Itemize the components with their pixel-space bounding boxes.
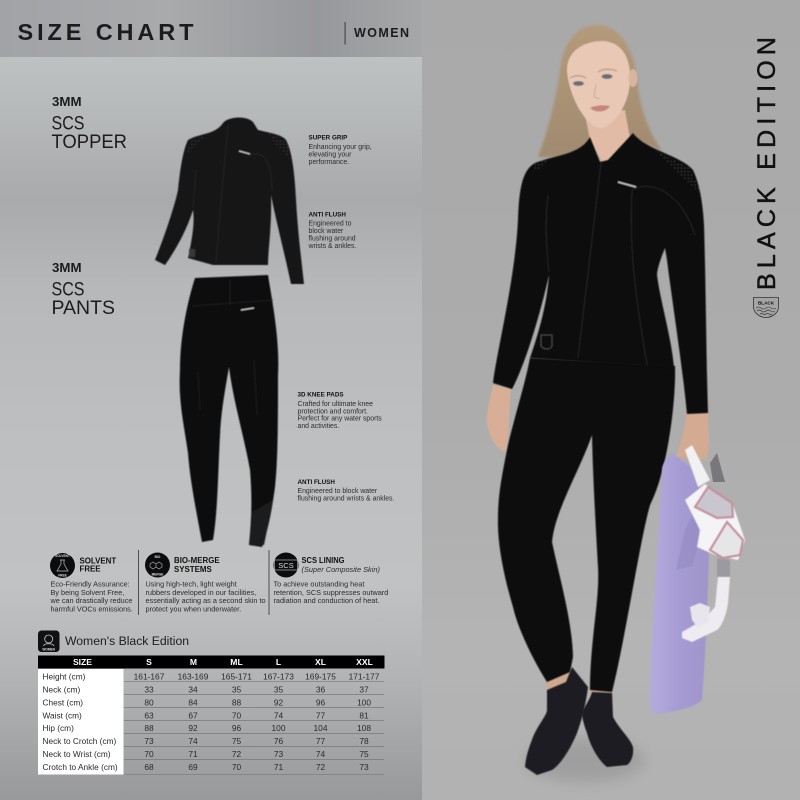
table values: 74 — [188, 736, 198, 746]
table values: 68 — [144, 762, 154, 772]
size table — [38, 656, 384, 774]
table heading — [38, 630, 189, 652]
table heading: Women's Black Edition — [65, 634, 189, 648]
model hair — [538, 25, 663, 158]
callout: super grip: Enhancing your grip, — [308, 144, 372, 151]
subtitle: women: WOMEN — [354, 26, 409, 40]
table header row: L — [276, 657, 281, 667]
icon: solvent free badge — [50, 553, 75, 578]
table values: 88 — [144, 723, 154, 733]
icon: black shield logo: BLACK — [758, 300, 775, 306]
row labels column: Neck to Crotch (cm) — [42, 736, 116, 746]
table values: 73 — [144, 736, 154, 746]
table values: 161-167 — [134, 672, 165, 682]
feature: bio-merge systems — [145, 552, 266, 614]
heading: SCS Topper: TOPPER — [52, 131, 127, 153]
table values: 100 — [272, 723, 286, 733]
callout: anti flush topper: Engineered to — [308, 220, 352, 228]
feature: bio-merge systems: Using high-tech, light weight — [146, 580, 237, 588]
table values: 104 — [314, 723, 328, 733]
icon: bio-merge badge: MERGE — [152, 572, 163, 576]
row labels column: Waist (cm) — [42, 710, 82, 720]
table values: 92 — [188, 723, 198, 733]
table values: 167-173 — [263, 672, 294, 682]
table values: 78 — [359, 736, 369, 746]
table values: 77 — [316, 710, 325, 720]
table values: 169-175 — [305, 672, 336, 682]
model left shoe — [525, 667, 588, 775]
floor shadow — [525, 738, 645, 782]
callout: 3D knee pads: 3D KNEE PADS — [298, 392, 344, 398]
feature: solvent free: Eco-Friendly Assurance: — [50, 580, 130, 588]
table values: 96 — [316, 697, 325, 707]
model photo — [487, 25, 745, 775]
callout: anti flush pants: Engineered to block water — [298, 488, 378, 495]
table values: 70 — [232, 710, 241, 720]
callout: anti flush topper — [308, 212, 356, 250]
callout: super grip: SUPER GRIP — [308, 134, 347, 142]
icon: solvent free badge: FREE — [58, 574, 67, 578]
feature: bio-merge systems: protect you when underwater. — [146, 604, 241, 614]
table values: 37 — [359, 684, 369, 694]
row labels column — [38, 669, 124, 774]
table values: 33 — [144, 684, 154, 694]
model snorkel top — [710, 453, 725, 482]
row labels column: Crotch to Ankle (cm) — [42, 762, 118, 772]
feature: SCS lining: To achieve outstanding heat — [274, 580, 364, 588]
heading: SCS Pants — [52, 260, 115, 319]
heading: SCS Pants: SCS — [52, 278, 84, 300]
callout: anti flush pants: flushing around wrists & ankles. — [298, 496, 394, 502]
feature: SCS lining: (Super Composite Skin) — [302, 565, 380, 574]
feature: SCS lining: retention, SCS suppresses outward — [274, 588, 388, 597]
callout: anti flush pants — [298, 479, 394, 502]
heading: SCS Topper: SCS — [52, 112, 84, 134]
model jacket — [493, 133, 708, 414]
table values: 84 — [188, 697, 198, 707]
table values: 34 — [188, 684, 198, 694]
row labels column: Hip (cm) — [42, 723, 74, 733]
icon: black shield logo — [754, 298, 778, 318]
table values: 163-169 — [178, 672, 209, 682]
callout: super grip: performance. — [308, 159, 349, 166]
table header row — [38, 656, 384, 668]
model snorkel — [682, 558, 730, 642]
table values: 71 — [274, 762, 283, 772]
title: SIZE CHART — [18, 19, 194, 45]
feature: SCS lining — [274, 552, 388, 605]
table header row: XXL — [356, 657, 373, 667]
callout: 3D knee pads: protection and comfort. — [298, 408, 368, 416]
vertical title: black edition: BLACK EDITION — [753, 37, 781, 290]
table values: 72 — [316, 762, 325, 772]
table header row: ML — [230, 657, 243, 667]
table values: 74 — [274, 710, 283, 720]
model ankles — [545, 668, 613, 702]
table values: 100 — [357, 697, 371, 707]
model mask strap — [685, 445, 710, 487]
table values: 35 — [274, 684, 283, 694]
callout: anti flush topper: flushing around — [308, 236, 356, 242]
feature: SCS lining: radiation and conduction of heat. — [274, 596, 379, 605]
icon: SCS badge: SCS — [278, 561, 294, 570]
table values: 73 — [359, 762, 369, 772]
feature: solvent free: harmful VOCs emissions. — [50, 604, 133, 614]
callout: anti flush topper: wrists & ankles. — [308, 243, 356, 250]
table values: 81 — [359, 710, 369, 720]
model dive mask — [685, 484, 745, 560]
table header row: XL — [315, 657, 326, 667]
table values: 73 — [274, 749, 283, 759]
icon: women badge: WOMEN — [42, 647, 56, 651]
model right hand — [676, 412, 709, 459]
model pants — [498, 358, 675, 692]
feature: bio-merge systems: essentially acting as a second skin to — [146, 596, 266, 605]
feature: bio-merge systems: BIO-MERGE — [174, 556, 220, 565]
table values: 171-177 — [349, 672, 380, 682]
model right shoe — [582, 692, 633, 767]
row labels column: Height (cm) — [42, 672, 86, 682]
feature: solvent free: we can drastically reduce — [50, 596, 132, 605]
table values: 76 — [274, 736, 283, 746]
table values: 80 — [144, 697, 154, 707]
table header row: SIZE — [73, 657, 92, 667]
header divider — [344, 22, 346, 44]
heading: SCS Pants: 3MM — [52, 260, 82, 275]
table header row: S — [146, 657, 152, 667]
table values: 36 — [316, 684, 325, 694]
table values: 71 — [188, 749, 198, 759]
table values: 67 — [188, 710, 198, 720]
model fin — [650, 453, 709, 714]
feature: bio-merge systems: rubbers developed in our facilities, — [146, 588, 256, 597]
feature: solvent free — [50, 553, 133, 614]
feature: SCS lining: SCS LINING — [302, 556, 344, 565]
heading: SCS Pants: PANTS — [52, 297, 115, 319]
row labels column: Neck to Wrist (cm) — [42, 749, 111, 759]
photo background — [422, 0, 800, 800]
feature: solvent free: SOLVENT — [80, 556, 116, 566]
table values: 75 — [359, 749, 369, 759]
callout: anti flush topper: ANTI FLUSH — [308, 212, 346, 218]
row labels column: Neck (cm) — [42, 684, 81, 694]
callout: anti flush topper: block water — [308, 228, 344, 235]
model neck — [585, 110, 630, 165]
callout: 3D knee pads — [298, 392, 382, 430]
table values: 63 — [144, 710, 154, 720]
table values: 70 — [144, 749, 154, 759]
icon: bio-merge badge — [145, 552, 170, 578]
callout: 3D knee pads: Crafted for ultimate knee — [298, 401, 373, 408]
table values: 72 — [232, 749, 241, 759]
model face — [567, 41, 638, 128]
header band — [0, 0, 422, 57]
table values: 74 — [316, 749, 325, 759]
product: pants — [180, 275, 278, 547]
table values — [134, 672, 380, 772]
callout: super grip — [308, 134, 372, 166]
callout: 3D knee pads: and activities. — [298, 423, 339, 430]
table values: 70 — [232, 762, 241, 772]
table values: 75 — [232, 736, 241, 746]
table values: 35 — [232, 684, 241, 694]
table values: 165-171 — [221, 672, 252, 682]
table header row: M — [190, 657, 197, 667]
table values: 96 — [232, 723, 241, 733]
model left hand — [487, 385, 511, 452]
feature: solvent free: FREE — [80, 564, 101, 574]
callout: 3D knee pads: Perfect for any water sports — [298, 416, 382, 422]
table values: 108 — [357, 723, 371, 733]
left panel background — [0, 0, 422, 800]
icon: bio-merge badge: BIO — [155, 555, 161, 559]
table values: 92 — [274, 697, 283, 707]
table values: 69 — [188, 762, 198, 772]
icon: women badge — [38, 630, 60, 652]
icon: solvent free badge: SOLVENT — [55, 554, 70, 558]
callout: super grip: elevating your — [308, 152, 352, 158]
heading: SCS Topper: 3MM — [52, 94, 82, 109]
callout: anti flush pants: ANTI FLUSH — [298, 479, 335, 486]
row labels column: Chest (cm) — [42, 697, 83, 707]
feature: solvent free: By being Solvent Free, — [50, 588, 124, 597]
feature: bio-merge systems: SYSTEMS — [174, 565, 212, 574]
table values: 88 — [232, 697, 241, 707]
heading: SCS Topper — [52, 94, 127, 153]
product: topper jacket — [155, 118, 304, 284]
table values: 77 — [316, 736, 325, 746]
